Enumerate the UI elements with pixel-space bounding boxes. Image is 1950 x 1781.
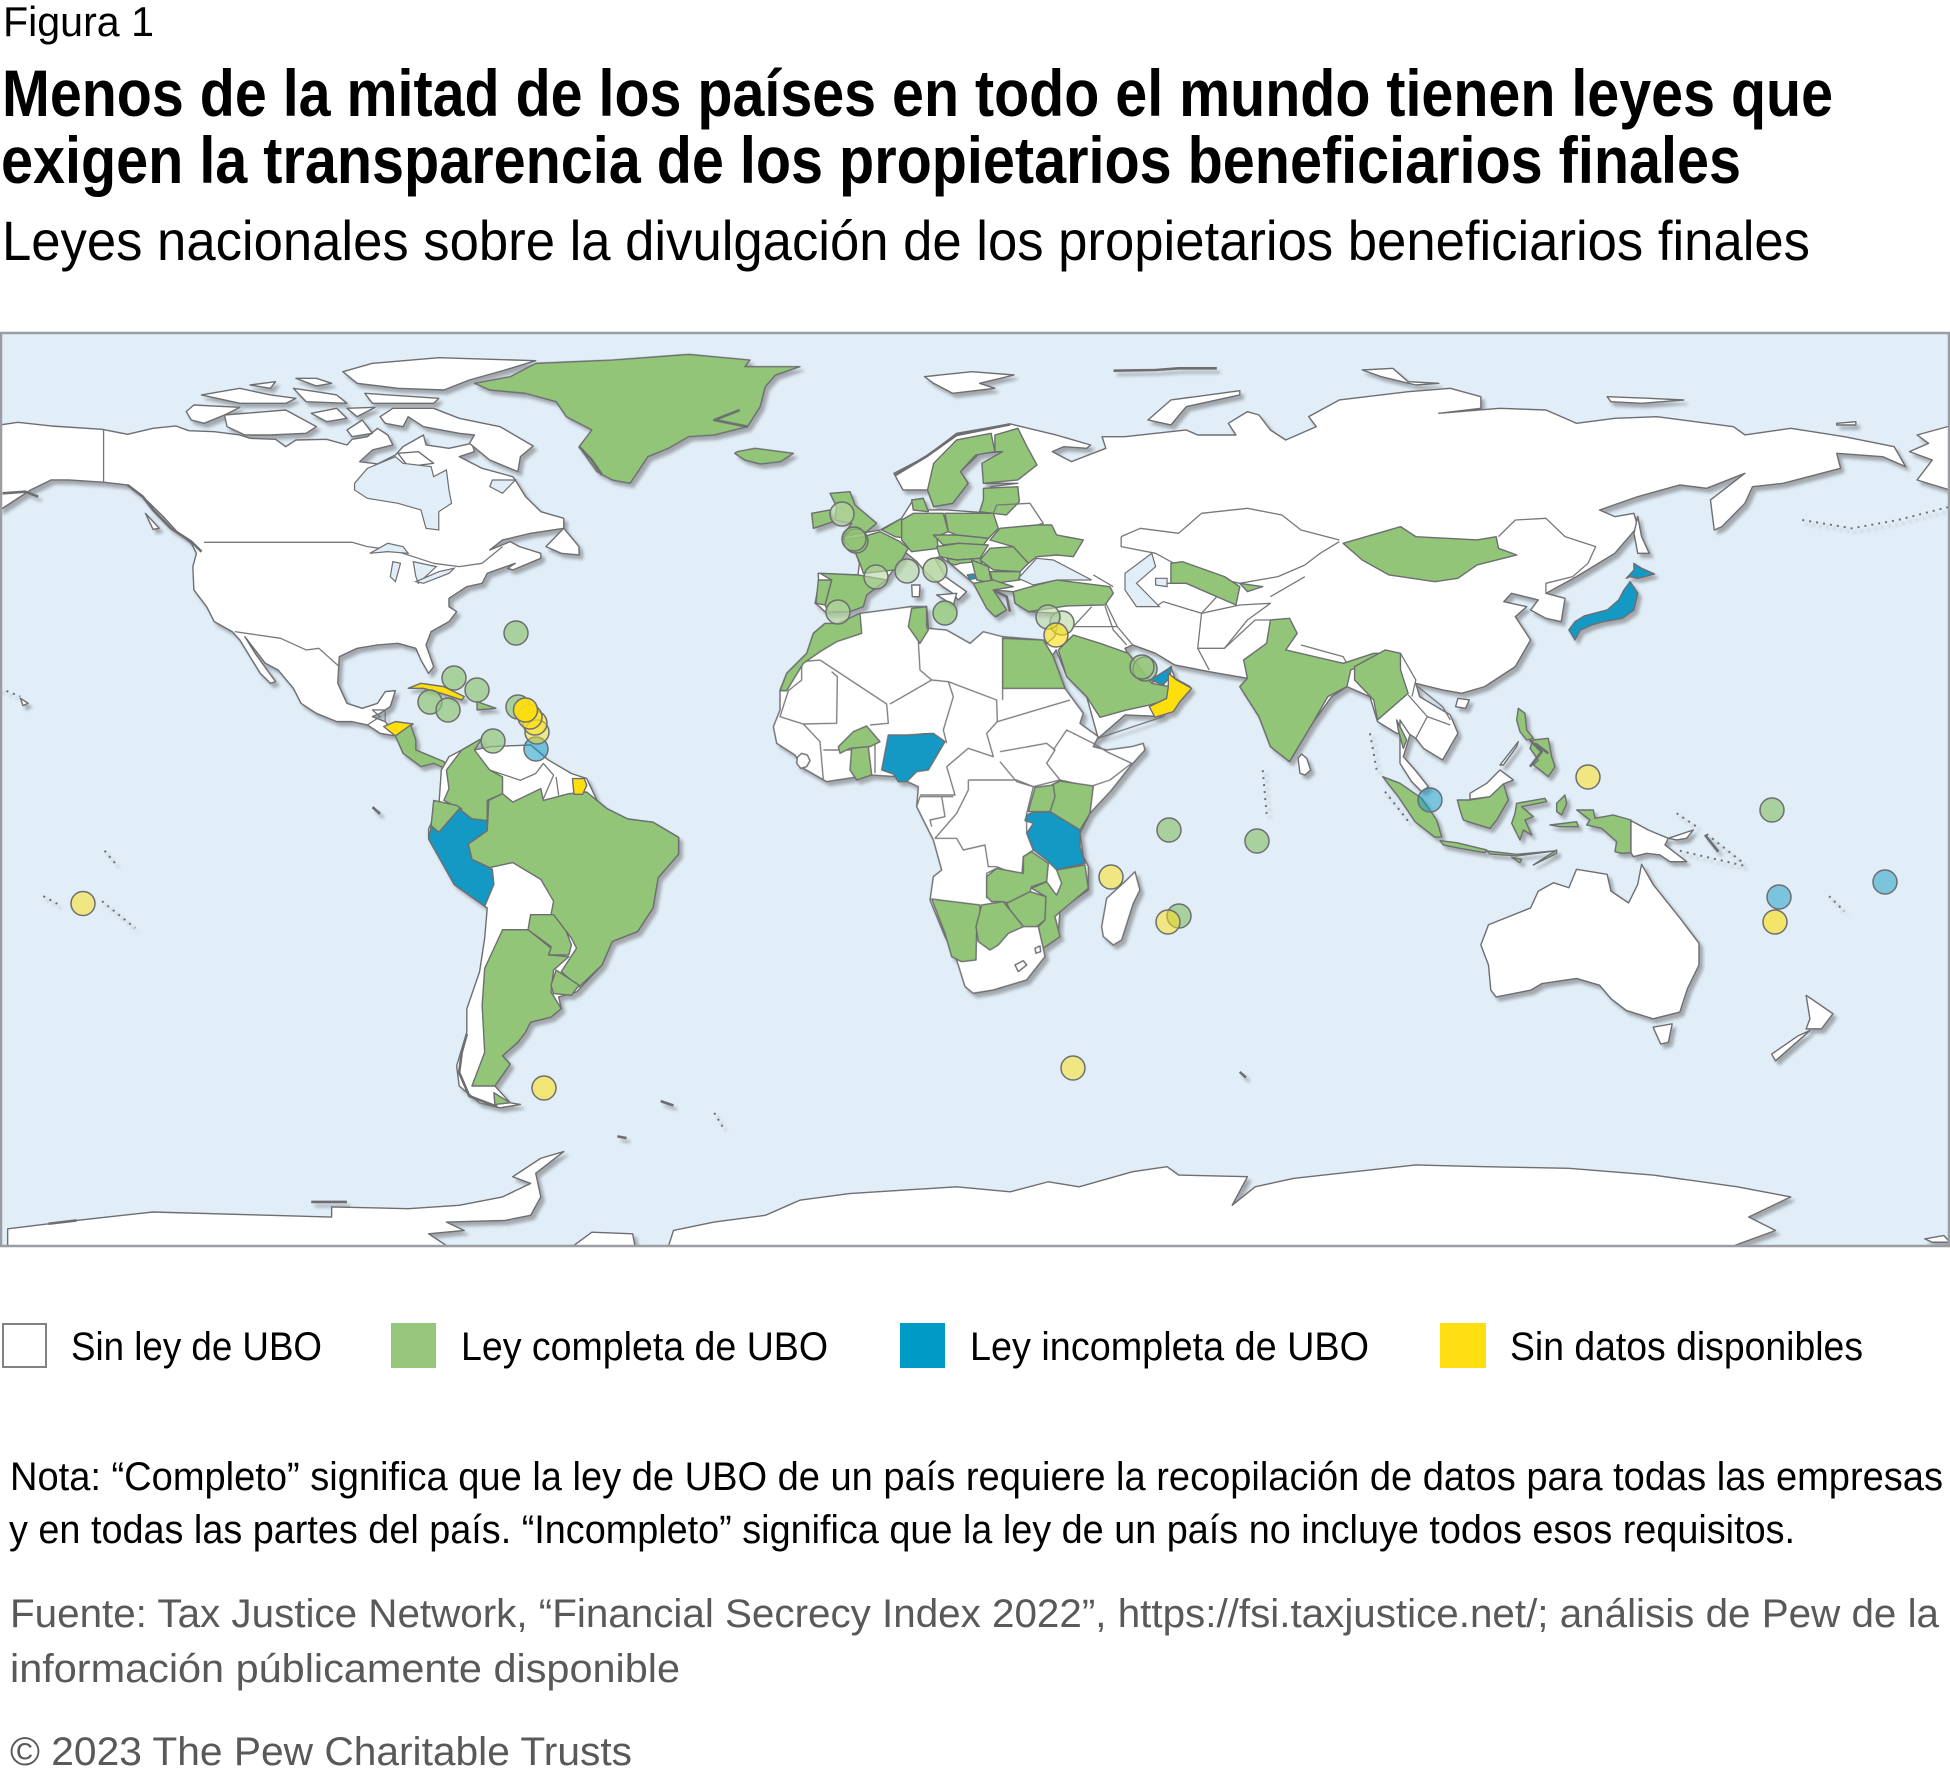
legend <box>3 1323 1863 1369</box>
australia, new zealand, antarctica east <box>668 770 1950 1247</box>
legend swatch: sin datos <box>1440 1323 1486 1368</box>
asia pacific islands <box>1298 708 1718 865</box>
source: Fuente: Tax Justice Network, “Financial Secrecy Index 2022”, https://fsi.taxjustice.net/; análisis de Pew de la <box>10 1592 1940 1636</box>
small jurisdiction circles <box>71 502 1897 1100</box>
source <box>10 1592 1940 1691</box>
source: información públicamente disponible <box>10 1647 680 1691</box>
map frame <box>1 333 1949 1246</box>
north america <box>0 358 579 770</box>
south america <box>43 738 724 1138</box>
legend label: sin datos: Sin datos disponibles <box>1510 1325 1863 1369</box>
note <box>9 1455 1943 1552</box>
africa <box>773 607 1145 993</box>
legend label: sin ley: Sin ley de UBO <box>71 1325 322 1369</box>
antarctica west <box>8 1152 635 1247</box>
europe and middle east <box>812 492 1192 717</box>
title <box>1 56 1833 197</box>
inland seas and lakes <box>355 457 1167 607</box>
legend swatch: ley incompleta <box>900 1323 945 1368</box>
map ocean background <box>1 333 1949 1246</box>
greenland <box>474 354 800 483</box>
copyright: © 2023 The Pew Charitable Trusts <box>10 1730 632 1774</box>
legend swatch: sin ley <box>3 1324 46 1367</box>
legend swatch: ley completa <box>391 1323 436 1368</box>
land masses <box>0 354 1950 1247</box>
title: exigen la transparencia de los propietarios beneficiarios finales <box>1 123 1741 197</box>
legend label: ley incompleta: Ley incompleta de UBO <box>970 1325 1369 1369</box>
world map <box>0 354 1950 1247</box>
legend label: ley completa: Ley completa de UBO <box>461 1325 828 1369</box>
subtitle: Leyes nacionales sobre la divulgación de los propietarios beneficiarios finales <box>2 209 1810 272</box>
note: y en todas las partes del país. “Incompleto” significa que la ley de un país no incluye todos esos requisitos. <box>9 1508 1795 1552</box>
eurasia <box>815 368 1950 762</box>
